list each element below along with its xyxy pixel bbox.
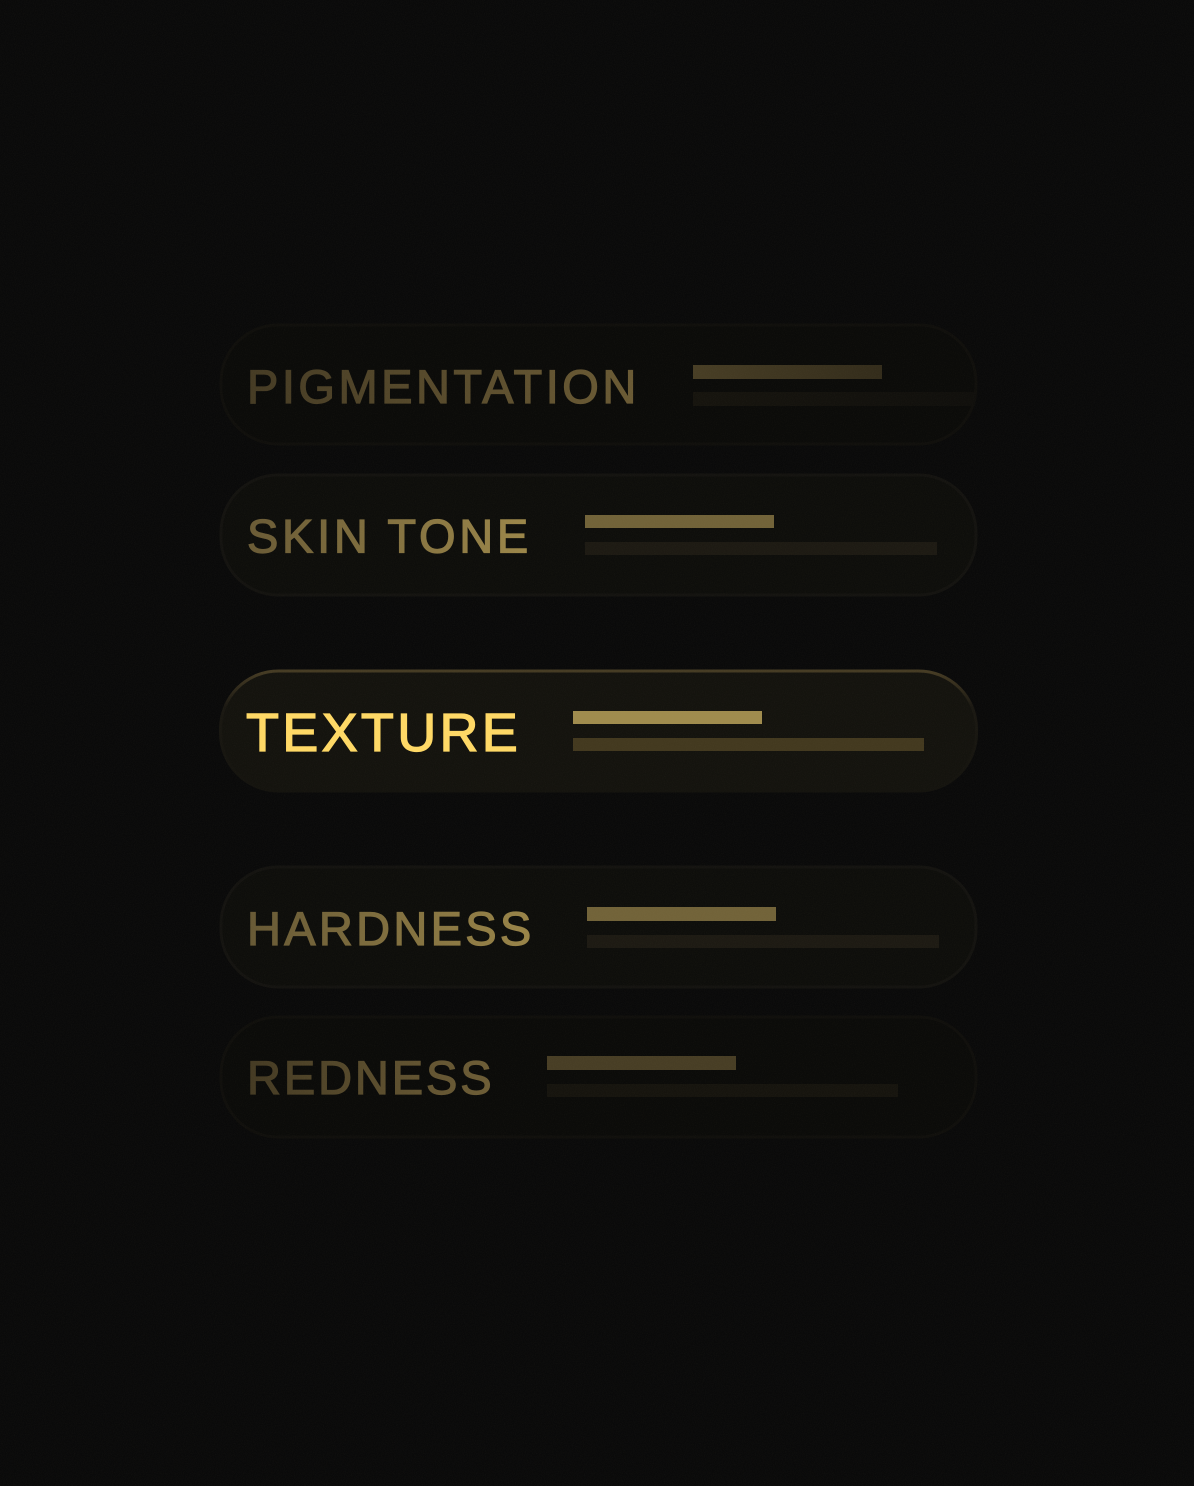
heading: skin tone: SKIN TONE: [247, 510, 532, 562]
panel: skin tone row: [221, 475, 976, 595]
bar: skin tone value: [585, 515, 774, 528]
bar: redness track: [547, 1084, 898, 1097]
bar: texture track: [573, 738, 924, 751]
heading: hardness: HARDNESS: [247, 902, 535, 955]
panel: pigmentation row: [250, 365, 882, 406]
bar: pigmentation value: [693, 365, 882, 379]
panel: texture row (active): [220, 671, 976, 791]
heading: texture: TEXTURE: [246, 703, 521, 763]
bar: hardness value: [587, 907, 776, 921]
bar: redness value: [547, 1056, 736, 1070]
bar: skin tone track: [585, 542, 937, 555]
panel: redness row: [221, 1017, 976, 1137]
panel: metric list: [220, 325, 977, 1137]
bar: hardness track: [587, 935, 939, 948]
heading: redness: REDNESS: [247, 1051, 495, 1104]
heading: pigmentation: PIGMENTATION: [247, 360, 640, 413]
panel: hardness row: [221, 867, 976, 987]
bar: texture value: [573, 711, 762, 724]
bar: pigmentation track: [693, 392, 834, 406]
